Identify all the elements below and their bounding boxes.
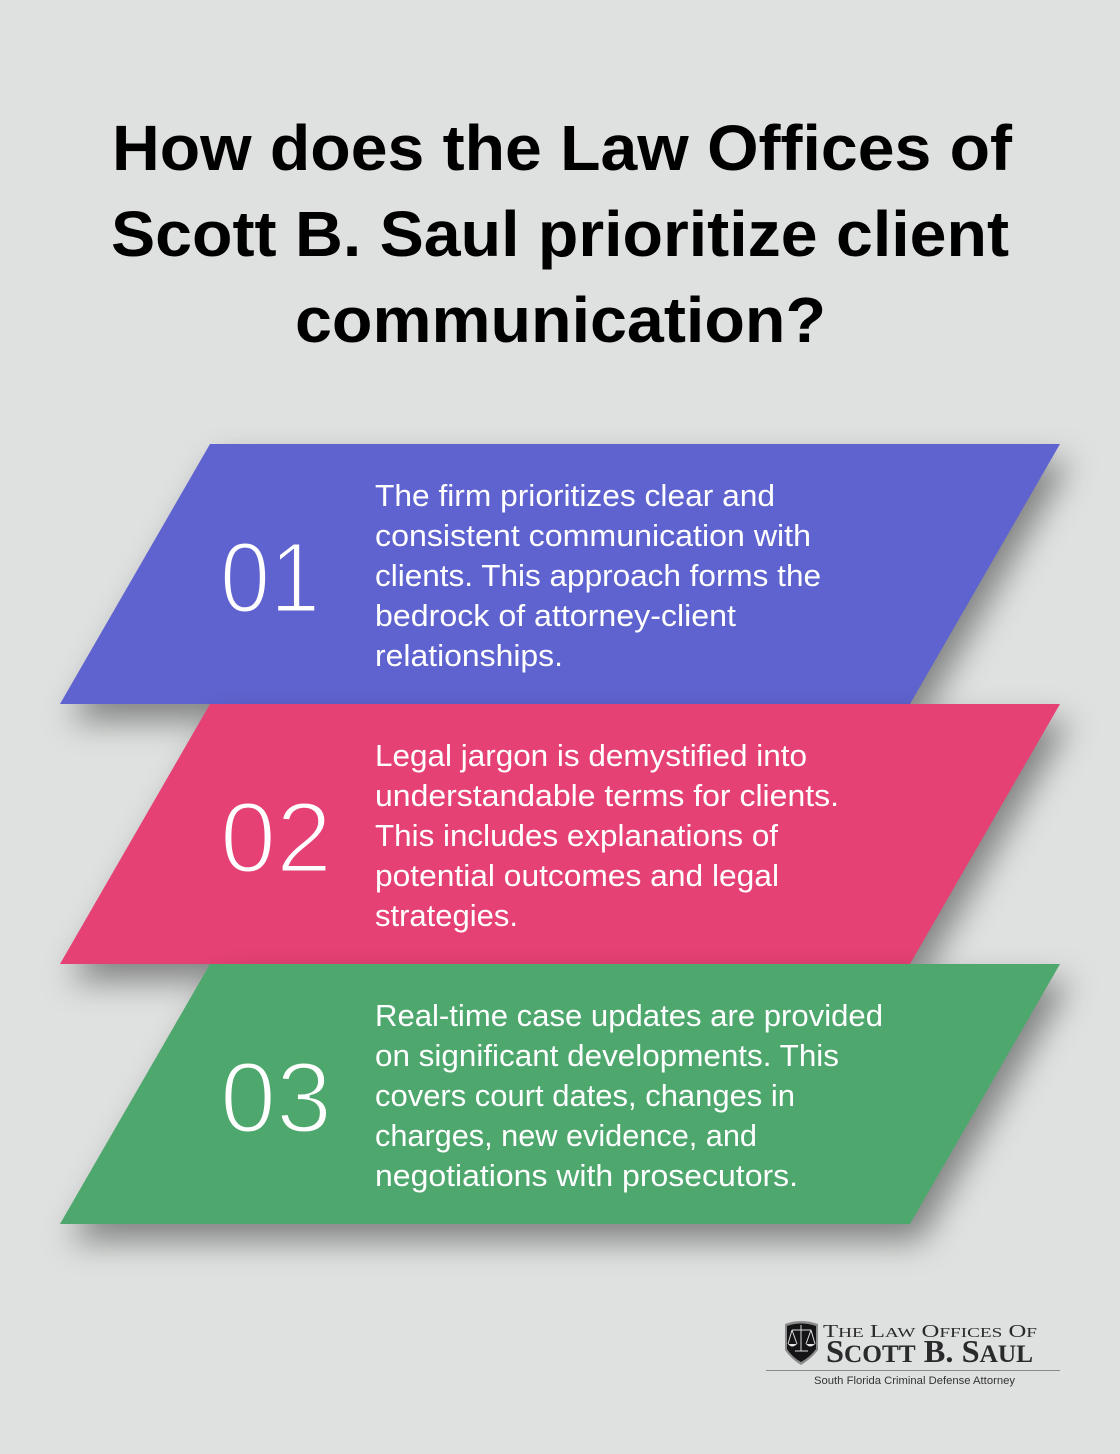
text: step 01: consistent communication with	[375, 518, 811, 553]
text: step 03: Real-time case updates are provided	[375, 998, 883, 1033]
logo	[766, 1321, 1060, 1387]
logo text: Scott B. Saul: SCOTT B. SAUL	[826, 1333, 1033, 1369]
text: step 01	[375, 478, 821, 673]
icon: scales shield	[785, 1321, 818, 1365]
logo text: firm name: T HE L AW O FFICES O F	[823, 1321, 1037, 1341]
text: step 02: potential outcomes and legal	[375, 858, 779, 893]
text: step 03	[375, 998, 883, 1193]
text: step 01: relationships.	[375, 638, 563, 673]
number 01: 01	[220, 522, 320, 634]
text: step 02: Legal jargon is demystified into	[375, 738, 807, 773]
text: step 01: clients. This approach forms the	[375, 558, 821, 593]
title: How does the Law Offices of	[112, 112, 1013, 184]
title	[111, 112, 1013, 356]
text: step 02	[375, 738, 839, 933]
text: step 01: bedrock of attorney-client	[375, 598, 736, 633]
number 03: 03	[220, 1042, 332, 1154]
text: step 02: understandable terms for clients.	[375, 778, 839, 813]
panel: step 02	[60, 704, 1070, 981]
text: step 02: strategies.	[375, 898, 518, 933]
text: step 03: charges, new evidence, and	[375, 1118, 757, 1153]
title: Scott B. Saul prioritize client	[111, 198, 1009, 270]
text: step 03: on significant developments. This	[375, 1038, 839, 1073]
text: step 03: negotiations with prosecutors.	[375, 1158, 798, 1193]
panel: step 01	[60, 444, 1070, 721]
text: step 03: covers court dates, changes in	[375, 1078, 795, 1113]
number 02: 02	[220, 782, 332, 894]
title: communication?	[295, 284, 826, 356]
text: step 01: The firm prioritizes clear and	[375, 478, 775, 513]
panel: step 03	[60, 964, 1070, 1241]
text: step 02: This includes explanations of	[375, 818, 778, 853]
logo tagline: South Florida Criminal Defense Attorney	[814, 1375, 1016, 1387]
